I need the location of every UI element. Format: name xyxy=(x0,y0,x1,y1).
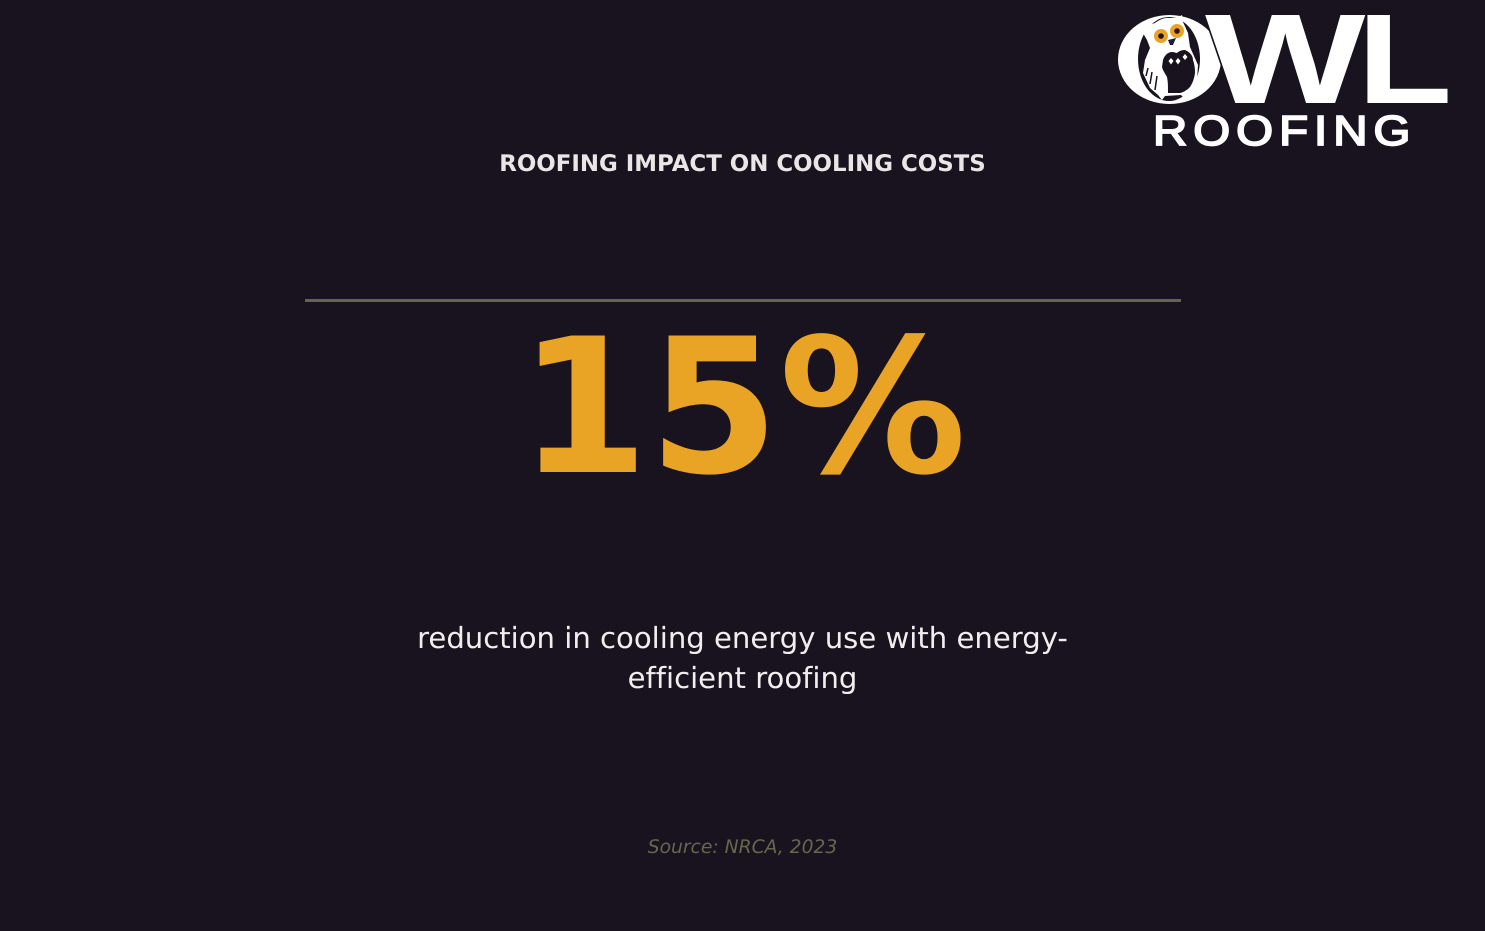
description xyxy=(417,621,1068,695)
description: efficient roofing xyxy=(628,661,857,695)
description: reduction in cooling energy use with energy- xyxy=(417,621,1068,655)
source: Source: NRCA, 2023 xyxy=(648,837,837,858)
logo: Owl Roofing xyxy=(1118,0,1452,154)
title: ROOFING IMPACT ON COOLING COSTS xyxy=(499,151,986,177)
icon: owl in letter O xyxy=(1118,15,1221,104)
logo wordmark: ROOFING: ROOFING xyxy=(1153,107,1416,154)
divider line xyxy=(305,299,1181,302)
big stat: 15%: 15% xyxy=(518,299,967,517)
